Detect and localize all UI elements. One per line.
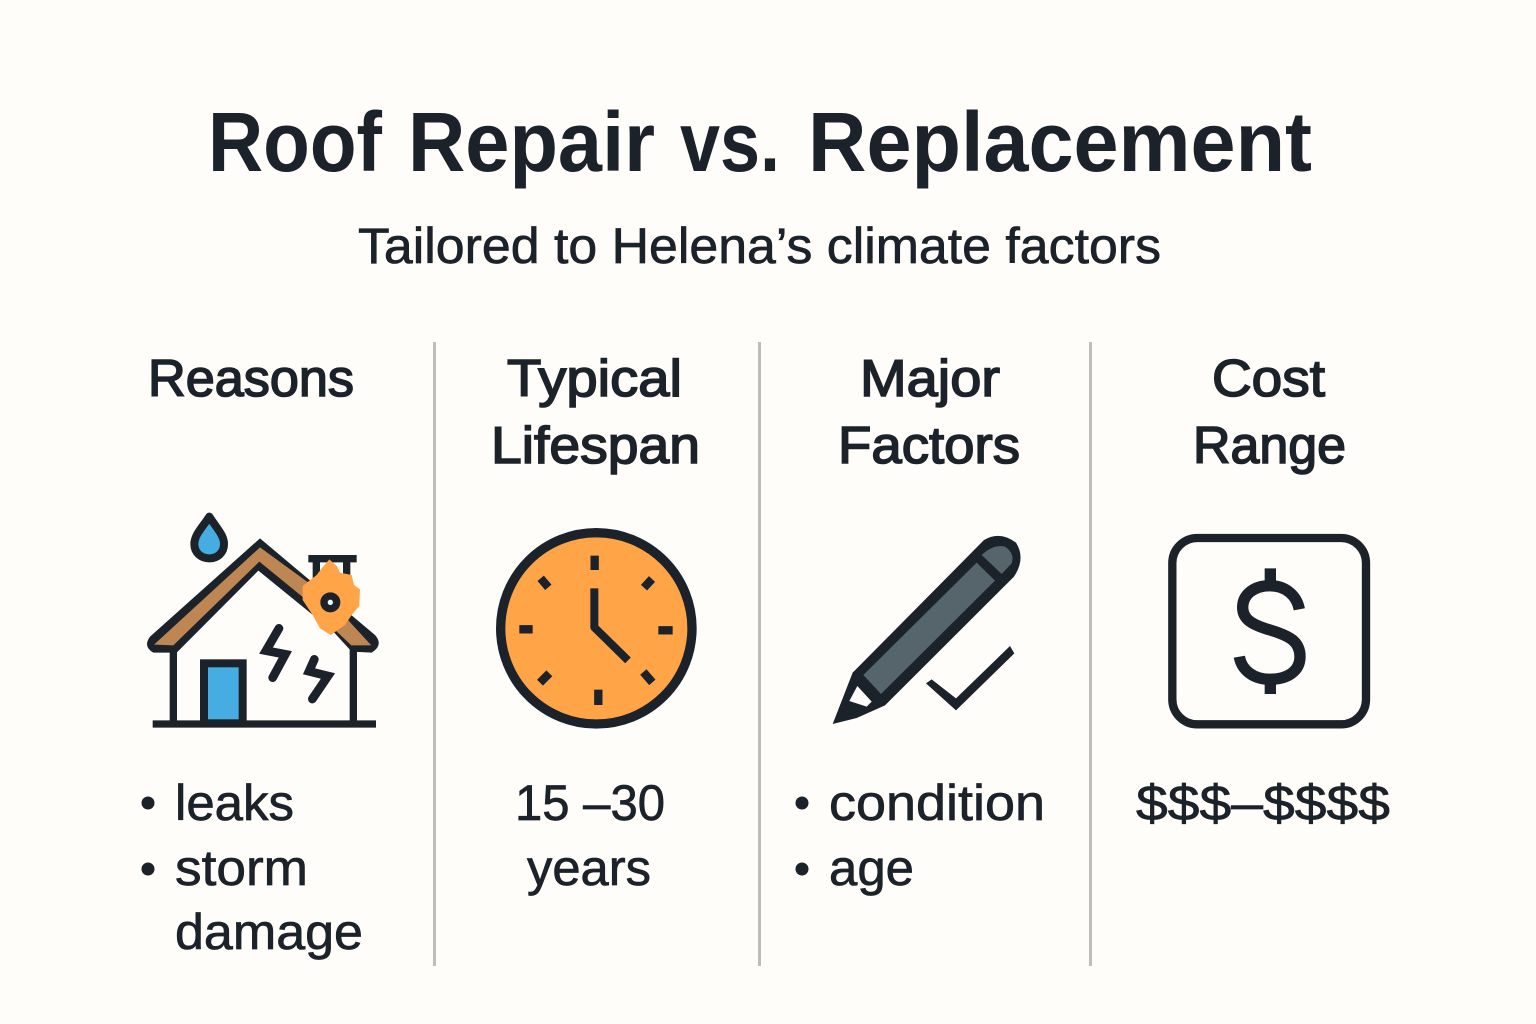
- title: [208, 95, 1312, 189]
- damage hole: [324, 596, 337, 609]
- pencil eraser: [982, 546, 1012, 574]
- list: reasons: storm: [175, 840, 308, 896]
- box outline: [1172, 538, 1366, 724]
- pencil tip: [849, 686, 872, 707]
- panel: typical lifespan: [491, 350, 700, 896]
- heading: typical lifespan: [491, 350, 700, 475]
- check mark: [926, 646, 1014, 710]
- damage patch: [303, 559, 360, 635]
- list: reasons: leaks: [175, 775, 294, 831]
- heading: cost range: Range: [1193, 417, 1346, 475]
- heading: typical lifespan: Typical: [507, 350, 682, 408]
- lightning crack right: [309, 659, 328, 699]
- icon: pencil and check: [833, 536, 1021, 724]
- clock ticks: [519, 556, 673, 705]
- icon: water drop: [194, 517, 224, 558]
- panel: reasons: [142, 350, 379, 960]
- dollar sign: [1239, 568, 1300, 694]
- lightning crack left: [266, 628, 285, 678]
- heading: typical lifespan: Lifespan: [491, 417, 700, 475]
- house walls: [173, 647, 353, 724]
- door: [204, 663, 243, 723]
- roof: [147, 538, 379, 653]
- list: factors: age: [829, 840, 914, 896]
- pencil body: [833, 536, 1021, 724]
- text: cost: $$$–$$$$: [1136, 775, 1390, 831]
- title: Repair: [408, 95, 655, 189]
- ground line: [153, 713, 376, 735]
- heading: cost range: Cost: [1212, 350, 1326, 408]
- icon: dollar box: [1172, 538, 1366, 724]
- icon: clock: [501, 533, 692, 724]
- clock hands: [594, 588, 628, 660]
- text: years: [515, 775, 665, 896]
- chimney: [308, 559, 357, 580]
- heading: cost range: [1193, 350, 1346, 475]
- text: years: 15 –30: [515, 775, 665, 831]
- list: reasons: damage: [175, 904, 363, 960]
- clock face: [501, 533, 692, 724]
- heading: major factors: [838, 350, 1020, 475]
- panel: major factors: [796, 350, 1045, 896]
- list: reasons: [142, 775, 363, 960]
- subtitle: Tailored to Helena’s climate factors: [358, 218, 1161, 274]
- title: Replacement: [808, 95, 1312, 189]
- title: Roof: [208, 95, 383, 189]
- icon: damaged house: [147, 517, 379, 724]
- title: vs.: [680, 95, 780, 189]
- heading: reasons: Reasons: [148, 350, 354, 408]
- panel: cost range: [1136, 350, 1390, 831]
- list: factors: [796, 775, 1045, 896]
- pencil barrel: [863, 563, 995, 694]
- text: years: years: [527, 840, 651, 896]
- heading: major factors: Major: [860, 350, 1000, 408]
- heading: major factors: Factors: [838, 417, 1020, 475]
- list: factors: condition: [829, 775, 1045, 831]
